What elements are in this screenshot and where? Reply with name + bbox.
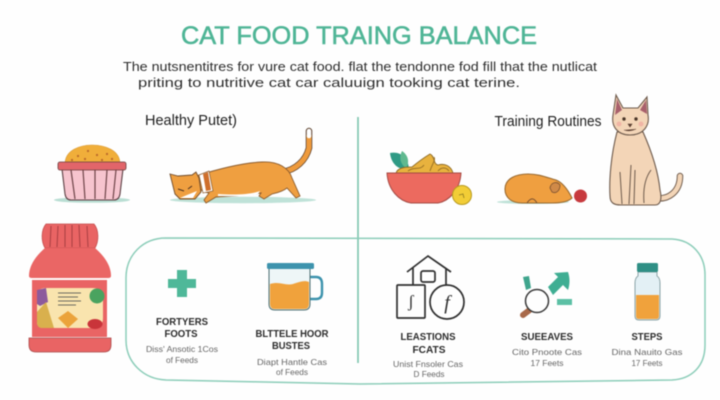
label: lessons feats: LEASTIONS [400,332,456,343]
label: subeaves: Cito Pnoote Cas [512,347,582,357]
label: bottle hoor: BLTTELE HOOR [256,329,329,340]
label: steps [612,332,682,368]
title: CAT FOOD TRAING BALANCE [181,22,537,50]
label: lessons feats: Unist Fnsoler Cas [393,359,463,369]
label: steps: Dina Nauito Gas [612,347,682,357]
intro text [123,59,597,90]
label: subeaves [512,332,582,368]
label: steps: STEPS [632,332,663,343]
label: bottle hoor: BUSTES [272,341,310,352]
icon: crawling cat [170,131,316,203]
label: bottle hoor: Diapt Hantle Cas [257,357,327,367]
icon: hamster-like cat [497,174,587,204]
label: lessons feats [393,332,463,379]
icon: sitting cat [610,95,680,205]
label: bottle hoor: of Feeds [276,367,308,377]
intro text: priting to nutritive cat car caluuign tooking cat terine. [138,75,520,90]
heading: training routines: Training Routines [494,114,602,130]
icon: magnifier and arrows [523,272,572,315]
intro text: The nutsnentitres for vure cat food. flat the tendonne fod fill that the nutlicat [123,59,597,74]
label: fortifiers foots [146,317,218,365]
icon: house with tiles: ʃ [407,292,414,311]
icon: house with tiles: f [444,292,452,314]
label: lessons feats: D Feeds [414,369,444,379]
label: fortifiers foots: FOOTS [164,329,198,340]
icon: muffin [54,145,130,203]
label: fortifiers foots: of Feeds [166,355,198,365]
label: lessons feats: FCATS [412,345,446,356]
label: subeaves: SUEEAVES [521,332,573,343]
icon: house with tiles [397,256,464,319]
icon: supplement jar [29,224,111,352]
icon: food bowl [387,151,472,204]
label: fortifiers foots: Diss' Ansotic 1Cos [146,344,218,354]
label: bottle hoor [256,329,329,377]
icon: plus [168,270,196,297]
heading: healthy: Healthy Putet) [145,113,237,129]
panel: tips [126,238,705,384]
icon: bottle [635,263,660,320]
label: fortifiers foots: FORTYERS [156,317,208,328]
icon: mug [267,263,322,310]
label: steps: 17 Feets [632,358,662,368]
label: subeaves: 17 Feets [530,358,564,368]
